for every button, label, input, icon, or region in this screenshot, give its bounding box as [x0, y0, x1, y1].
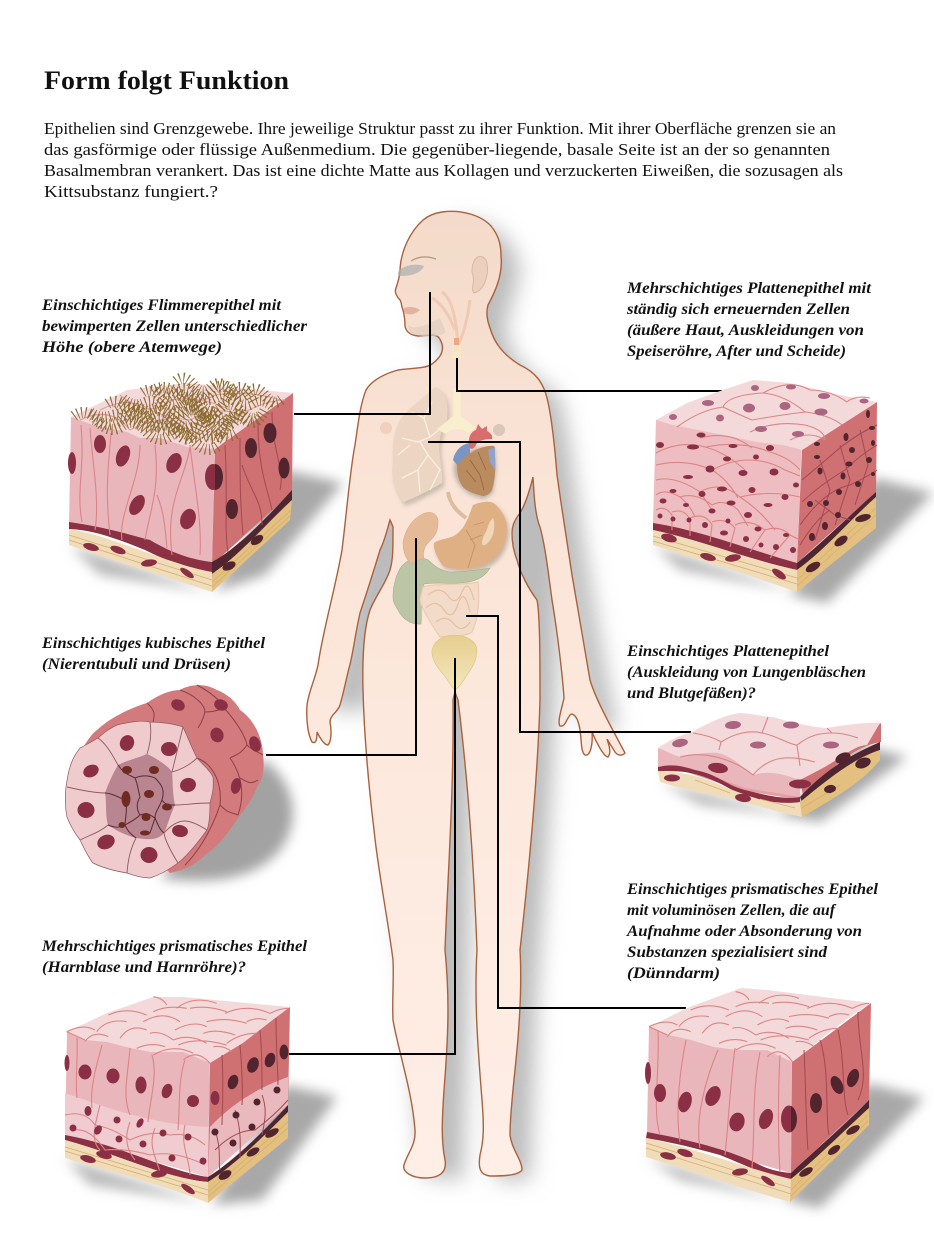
- label: [626, 643, 866, 702]
- intro text block: Basalmembran verankert. Das ist eine dichte Matte aus Kollagen und verzuckerten Eiweißen, die sozusagen als: [44, 161, 843, 180]
- tissue block: [645, 988, 924, 1208]
- label: [41, 938, 308, 976]
- label: Aufnahme oder Absonderung von: [626, 923, 862, 940]
- panel: simple squamous epithelium: [626, 643, 907, 822]
- label: [41, 635, 266, 673]
- panel: cuboidal epithelium: [41, 635, 293, 881]
- label: (Auskleidung von Lungenbläschen: [627, 664, 866, 681]
- organ: bladder: [432, 635, 477, 690]
- body silhouette: [307, 211, 625, 1178]
- intro text block: Epithelien sind Grenzgewebe. Ihre jeweilige Struktur passt zu ihrer Funktion. Mit ihrer Oberfläche grenzen sie an: [44, 119, 836, 138]
- label: Einschichtiges prismatisches Epithel: [626, 881, 879, 898]
- tube of cells: [65, 685, 293, 881]
- tissue block: [68, 378, 343, 592]
- label: und Blutgefäßen)?: [627, 685, 756, 702]
- cilia: [74, 378, 283, 450]
- panel: simple columnar epithelium: [626, 881, 924, 1208]
- label: Mehrschichtiges prismatisches Epithel: [41, 938, 308, 955]
- human body figure: [307, 211, 625, 1180]
- organ: heart: [453, 424, 496, 499]
- label: ständig sich erneuernden Zellen: [626, 301, 850, 318]
- panel: ciliated epithelium: [41, 297, 343, 592]
- label: Substanzen spezialisiert sind: [627, 944, 827, 961]
- label: Einschichtiges kubisches Epithel: [41, 635, 266, 652]
- label: Einschichtiges Flimmerepithel mit: [41, 297, 282, 314]
- label: (Harnblase und Harnröhre)?: [42, 959, 246, 976]
- label: (äußere Haut, Auskleidungen von: [627, 322, 864, 339]
- label: [626, 881, 879, 982]
- intro text block: das gasförmige oder flüssige Außenmedium. Die gegenüber-liegende, basale Seite ist an der so genannten: [44, 140, 830, 159]
- label: bewimperten Zellen unterschiedlicher: [42, 318, 308, 335]
- label: [41, 297, 308, 356]
- label: Speiseröhre, After und Scheide): [627, 343, 846, 360]
- intro text block: [44, 119, 843, 201]
- label: mit voluminösen Zellen, die auf: [627, 902, 837, 919]
- organ: small intestine: [420, 582, 479, 637]
- connector lines: [266, 292, 722, 1054]
- organ: trachea and bronchi: [437, 388, 476, 434]
- organ: breast details: [380, 422, 505, 436]
- label: [626, 280, 872, 360]
- panel: stratified squamous epithelium: [626, 280, 933, 603]
- organ: colon: [393, 558, 490, 624]
- label: Einschichtiges Plattenepithel: [626, 643, 830, 660]
- tissue block: [658, 713, 907, 822]
- organ: lung: [392, 387, 450, 506]
- intro text block: Kittsubstanz fungiert.?: [44, 182, 218, 201]
- panel: transitional epithelium: [41, 938, 337, 1205]
- title: Form folgt Funktion: [44, 66, 290, 95]
- label: (Nierentubuli und Drüsen): [42, 656, 231, 673]
- label: Mehrschichtiges Plattenepithel mit: [626, 280, 872, 297]
- tissue block: [64, 997, 337, 1205]
- face details: [398, 256, 488, 359]
- organ: liver: [403, 512, 438, 564]
- body drop shadow: [328, 222, 618, 1180]
- organ: stomach and esophagus: [434, 492, 509, 572]
- label: (Dünndarm): [627, 965, 720, 982]
- tissue block: [653, 380, 933, 603]
- label: Höhe (obere Atemwege): [41, 339, 222, 356]
